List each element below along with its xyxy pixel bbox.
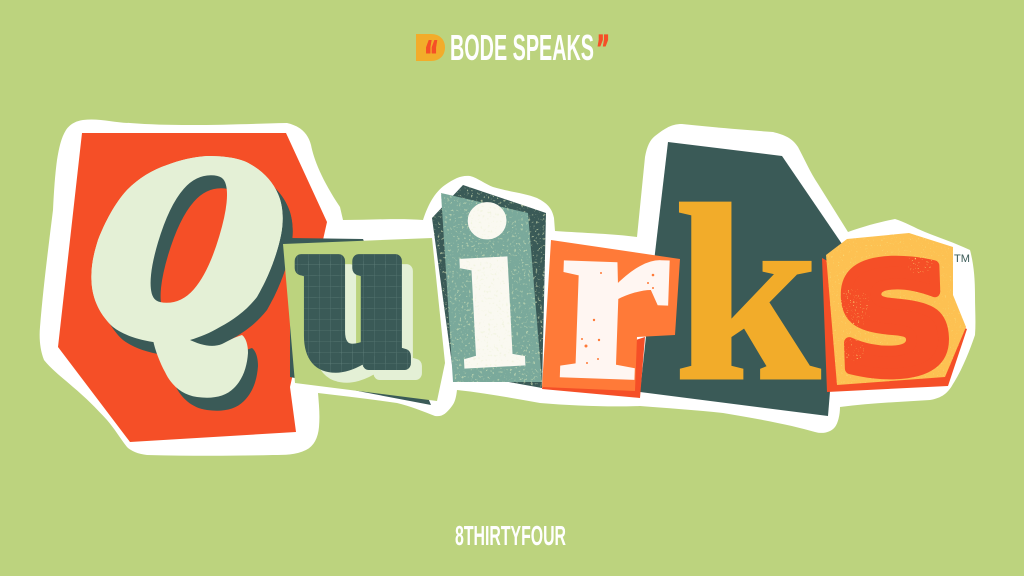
i face: i	[449, 156, 531, 419]
panel: yellow paper for s	[826, 233, 966, 385]
i speckles: i	[449, 156, 531, 419]
panel: red shadow paper for s	[822, 258, 967, 392]
opening quote mark: “	[424, 34, 439, 80]
yellow paper speckles	[826, 233, 966, 385]
closing quote mark: ”	[596, 29, 610, 70]
u shadow: u	[309, 176, 421, 422]
r speckles	[573, 272, 654, 364]
letter k: k	[674, 153, 820, 433]
logo wordmark: BODE SPEAKS	[450, 27, 594, 68]
panel: dark paper behind i	[432, 185, 546, 388]
footer credit: 8THIRTYFOUR	[455, 520, 566, 551]
panel: red shadow paper for r	[542, 337, 645, 398]
trademark: TM	[954, 253, 970, 265]
letter s: s	[833, 188, 955, 420]
letter i	[449, 156, 531, 419]
Q shadow bowl: Q	[70, 110, 318, 403]
panel: olive paper for u	[283, 238, 445, 401]
speckles on dark paper	[432, 185, 546, 388]
logo: Bode Speaks	[416, 27, 610, 80]
icon: D badge	[416, 34, 445, 61]
wordmark: Quirks	[40, 97, 975, 456]
Q face bowl: Q	[60, 97, 308, 390]
panel: dark paper behind k	[640, 142, 842, 416]
Q shadow swash	[163, 348, 258, 411]
letter Q	[91, 156, 293, 411]
s speckles	[837, 254, 933, 361]
panel: dark paper behind u	[290, 238, 431, 405]
speckles on teal paper	[441, 193, 542, 382]
u face: u	[298, 166, 410, 412]
panel: teal paper for i	[441, 193, 542, 382]
panel: red paper behind Q	[58, 133, 327, 442]
letter r: r	[553, 157, 677, 433]
u grid texture: u	[298, 166, 410, 412]
white sticker backing	[40, 120, 975, 456]
letter u	[298, 166, 421, 422]
panel: orange paper for r	[542, 240, 680, 391]
Q shadow	[110, 175, 293, 411]
Q face swash	[153, 335, 248, 398]
Q face	[91, 156, 283, 398]
